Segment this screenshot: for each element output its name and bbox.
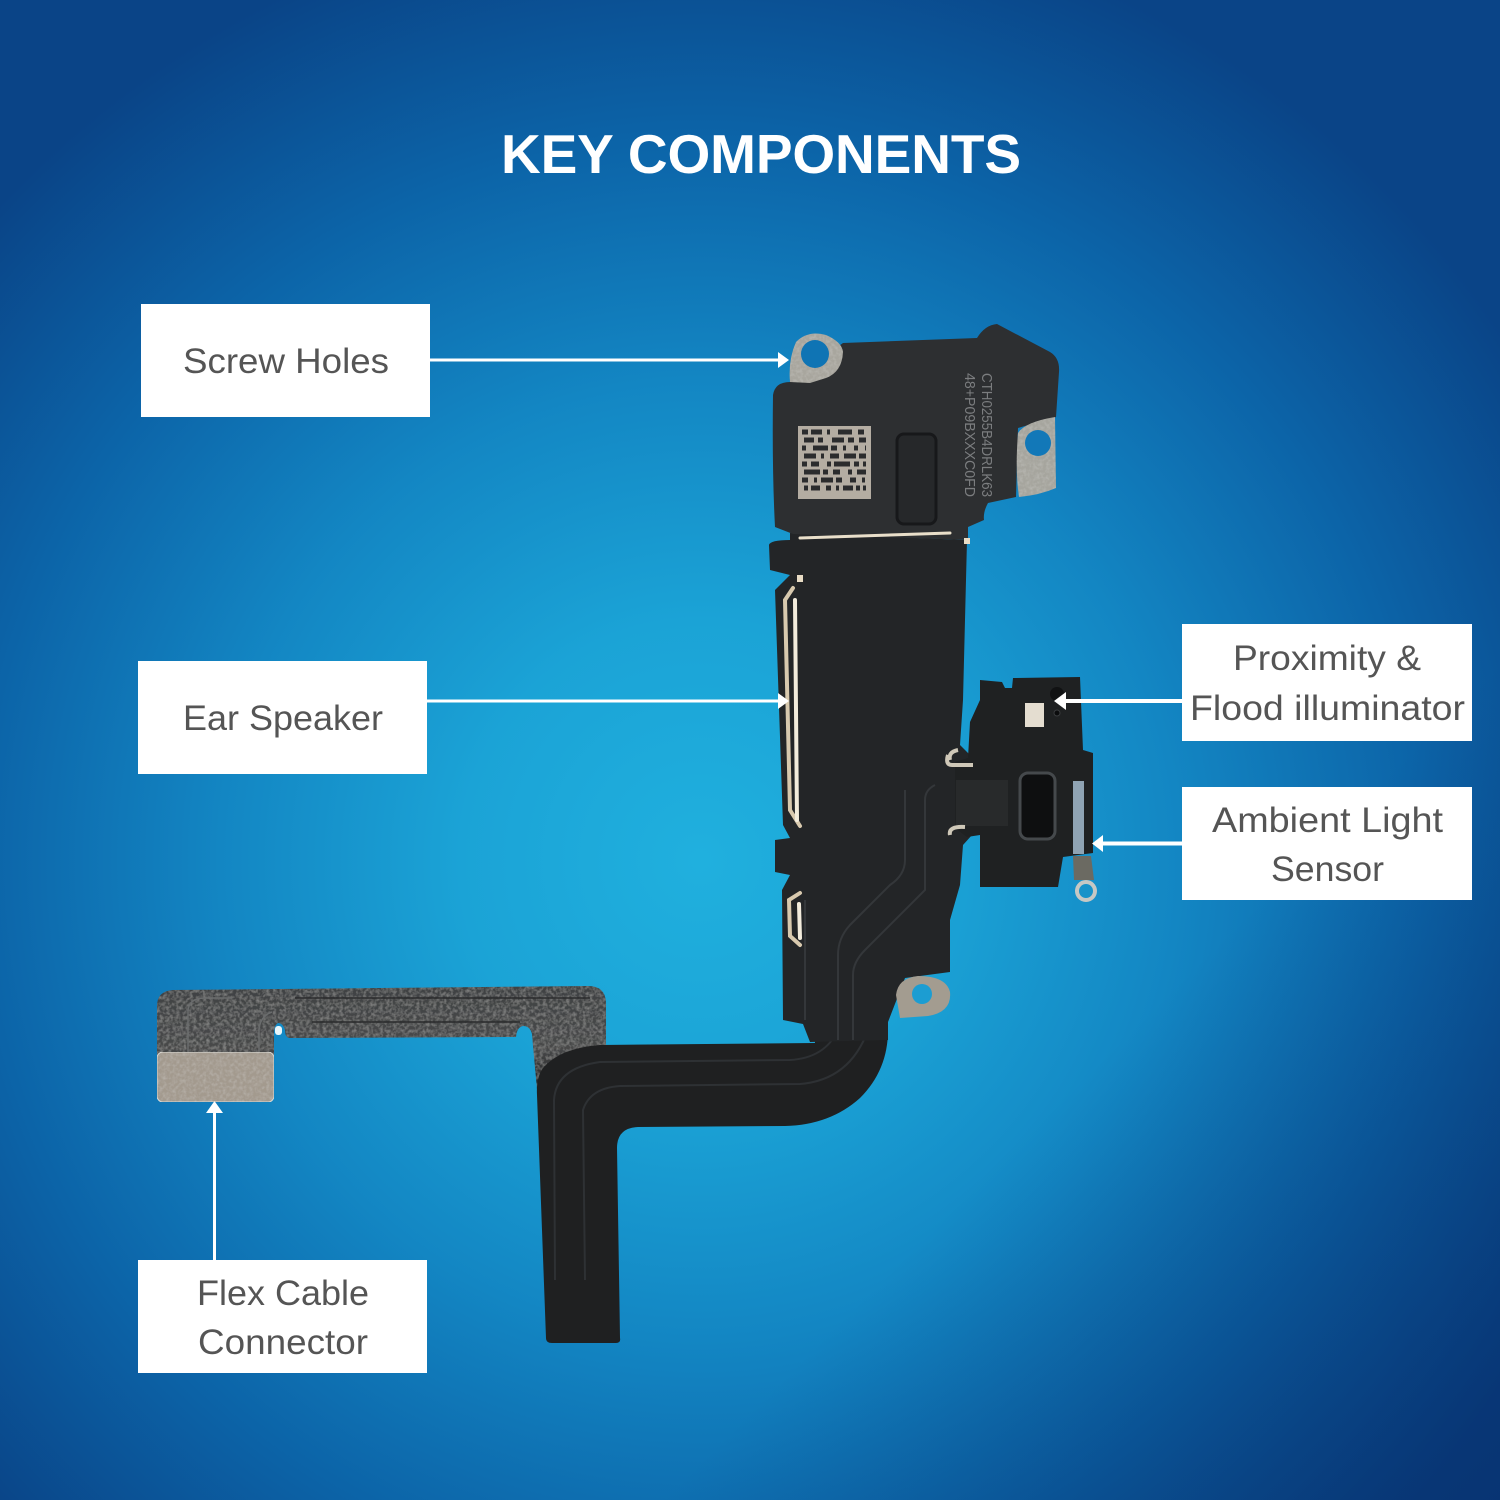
engraved serial number <box>961 373 995 497</box>
label box: Screw Holes <box>183 342 389 381</box>
flex cable hole <box>275 1026 282 1035</box>
flex traces on spine <box>805 785 935 1040</box>
label box <box>1182 624 1472 741</box>
black ribbon cable <box>537 1000 888 1343</box>
callout: screw holes <box>141 304 789 417</box>
data matrix code <box>798 426 871 499</box>
callout: flex cable connector <box>138 1101 427 1373</box>
label box: Proximity & <box>1233 639 1421 678</box>
ear mesh <box>1020 773 1055 839</box>
label box: Connector <box>198 1323 368 1362</box>
callout: ear speaker <box>138 661 789 774</box>
speaker port window <box>897 434 936 524</box>
engraved serial number: 48+P09BXXXC0FD <box>961 373 978 497</box>
engraved serial number: CTH0255B4DRLK63 <box>978 373 995 497</box>
arrow <box>1054 692 1182 710</box>
flood illuminator lens <box>1050 687 1064 716</box>
label box: Ambient Light <box>1212 801 1443 840</box>
sensor mounting ring <box>1073 856 1095 900</box>
arrow <box>427 693 789 709</box>
upper screw hole tab <box>790 334 843 383</box>
callout: proximity and flood illuminator <box>1054 624 1472 741</box>
speaker spine <box>769 533 975 1042</box>
component: ear speaker flex assembly <box>157 324 1095 1343</box>
arrow <box>430 352 789 368</box>
sensor bridge contacts <box>947 750 973 835</box>
label box <box>138 1260 427 1373</box>
label box <box>1182 787 1472 900</box>
arrow <box>206 1101 223 1260</box>
sensor assembly <box>947 677 1095 900</box>
label box <box>138 661 427 774</box>
label box: Ear Speaker <box>183 699 383 738</box>
label box: Flood illuminator <box>1190 689 1465 728</box>
flex cable connector plate <box>157 1052 274 1102</box>
title: KEY COMPONENTS <box>501 123 1021 185</box>
grey flex cable arm <box>157 986 606 1100</box>
upper shield plate <box>773 324 1059 540</box>
callout: ambient light sensor <box>1092 787 1472 900</box>
arrow <box>1092 835 1182 852</box>
spine metal contacts <box>785 533 970 945</box>
label box <box>141 304 430 417</box>
right screw hole tab <box>1017 417 1056 497</box>
label box: Sensor <box>1271 850 1384 889</box>
proximity sensor window <box>1025 703 1044 727</box>
label box: Flex Cable <box>197 1274 369 1313</box>
connector pad on sensor bridge <box>956 780 1008 826</box>
lower screw hole tab <box>896 976 950 1018</box>
ambient light sensor strip <box>1073 781 1084 854</box>
